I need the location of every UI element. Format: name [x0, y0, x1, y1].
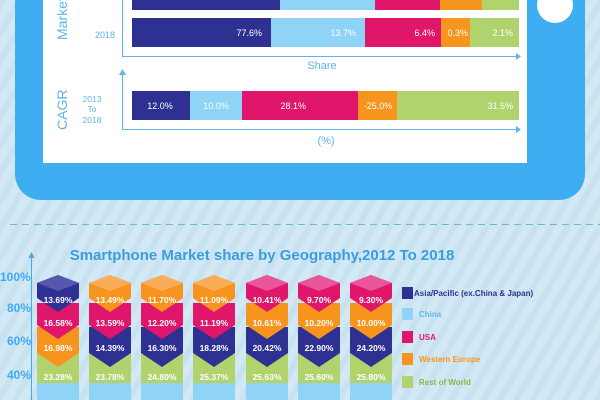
column 2017: 9.70%	[307, 295, 331, 305]
title: Smartphone Market share by Geography,2012 To 2018	[70, 247, 454, 264]
bar: 2018: 13.7%	[330, 28, 356, 38]
column 2016: 10.61%	[253, 318, 282, 328]
stacked columns	[37, 275, 392, 400]
column 2016	[246, 275, 288, 400]
column 2016: 20.42%	[253, 343, 282, 353]
column 2016: 25.63%	[253, 372, 282, 382]
bar: 2018	[95, 18, 519, 47]
column 2018: 9.30%	[359, 295, 383, 305]
column 2013: 13.59%	[96, 318, 125, 328]
legend: China	[419, 310, 442, 319]
column 2018: 10.00%	[357, 318, 386, 328]
bar: CAGR: 10.0%	[203, 101, 229, 111]
label: 2013 To 2018: 2013	[83, 94, 102, 104]
legend: Asia/Pacific (ex.China & Japan)	[414, 289, 533, 298]
legend: Rest of World	[419, 378, 471, 387]
column 2012: 23.28%	[44, 372, 73, 382]
column 2012: 16.98%	[44, 343, 73, 353]
bar: 2018: 77.6%	[236, 28, 262, 38]
label: CAGR: CAGR	[54, 90, 70, 130]
column 2014: 24.80%	[148, 372, 177, 382]
bar: 2018: 2.1%	[492, 28, 513, 38]
column 2013: 23.78%	[96, 372, 125, 382]
column 2012: 13.69%	[44, 295, 73, 305]
bar: CAGR: 28.1%	[280, 101, 306, 111]
column 2015: 25.37%	[200, 372, 229, 382]
column 2012	[37, 275, 79, 400]
column 2017: 10.20%	[305, 318, 334, 328]
column 2015: 18.28%	[200, 343, 229, 353]
column 2018	[350, 275, 392, 400]
y axis	[0, 252, 34, 400]
bar: previous year	[132, 0, 519, 10]
legend: Western Europe	[419, 355, 481, 364]
column 2013	[89, 275, 131, 400]
bar: 2018: 0.3%	[447, 28, 468, 38]
axis label: (%): (%)	[317, 135, 335, 147]
y axis: 60%	[7, 334, 31, 348]
column 2017: 25.60%	[305, 372, 334, 382]
column 2012: 16.58%	[44, 318, 73, 328]
column 2017: 22.90%	[305, 343, 334, 353]
y axis: 40%	[7, 368, 31, 382]
bar: CAGR: -25.0%	[364, 101, 392, 111]
column 2018: 25.80%	[357, 372, 386, 382]
tablet frame	[15, 0, 585, 200]
column 2017	[298, 275, 340, 400]
legend: USA	[419, 333, 436, 342]
column 2014: 16.30%	[148, 343, 177, 353]
column 2018: 24.20%	[357, 343, 386, 353]
axis: share	[122, 0, 521, 60]
tablet screen	[43, 0, 527, 163]
column 2015: 11.19%	[200, 318, 229, 328]
column 2015: 11.09%	[200, 295, 229, 305]
axis label: Share: Share	[307, 60, 337, 72]
label: 2013 To 2018: To	[88, 104, 97, 114]
y axis: 80%	[7, 301, 31, 315]
column 2013: 14.39%	[96, 343, 125, 353]
axis: CAGR	[119, 69, 521, 133]
CAGR chart	[54, 69, 521, 147]
bar: CAGR: 31.5%	[487, 101, 513, 111]
bar: 2018: 2018	[95, 30, 115, 40]
bar: 2018: 6.4%	[414, 28, 435, 38]
legend	[402, 287, 533, 388]
column 2014: 12.20%	[148, 318, 177, 328]
bar: CAGR: 12.0%	[147, 101, 173, 111]
y axis: 100%	[0, 270, 31, 284]
column 2015	[193, 275, 235, 400]
market share chart	[54, 0, 521, 72]
column 2013: 13.49%	[96, 295, 125, 305]
label: 2013 To 2018	[83, 94, 102, 125]
column 2014: 11.70%	[148, 295, 177, 305]
bar: CAGR	[132, 91, 519, 120]
icon: home button	[537, 0, 573, 23]
label: 2013 To 2018: 2018	[83, 115, 102, 125]
column 2014	[141, 275, 183, 400]
column 2016: 10.41%	[253, 295, 282, 305]
